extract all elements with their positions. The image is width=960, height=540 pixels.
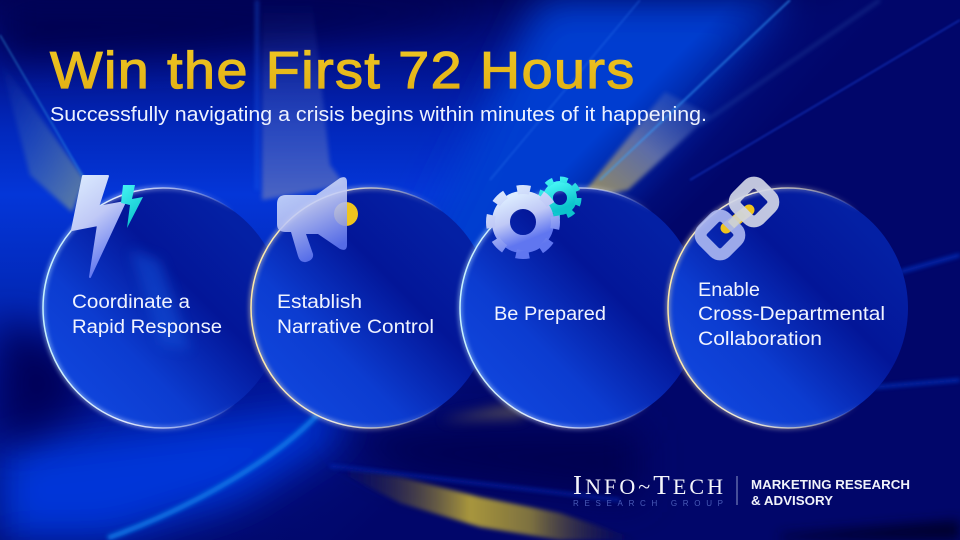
icon: lightning bolts bbox=[72, 176, 143, 277]
icon: gears bbox=[490, 180, 578, 254]
panel: be prepared bbox=[460, 180, 700, 428]
label: establish narrative control: Narrative Control bbox=[277, 317, 434, 338]
panel: establish narrative control bbox=[251, 177, 491, 428]
icon: chain links bbox=[697, 179, 777, 258]
panel: coordinate a rapid response bbox=[43, 176, 283, 428]
label: establish narrative control: Establish bbox=[277, 292, 362, 313]
logo: info-tech research group bbox=[573, 470, 910, 508]
label: coordinate a rapid response: Coordinate a bbox=[72, 292, 190, 313]
logo: info-tech research group: RESEARCH GROUP bbox=[573, 499, 723, 508]
label: coordinate a rapid response: Rapid Response bbox=[72, 317, 222, 338]
logo: info-tech research group: & ADVISORY bbox=[751, 493, 833, 508]
panel: enable cross-departmental collaboration bbox=[668, 179, 908, 428]
logo: info-tech research group: MARKETING RESEARCH bbox=[751, 477, 910, 492]
subtitle: Successfully navigating a crisis begins within minutes of it happening. bbox=[50, 104, 707, 126]
label: enable cross-departmental collaboration: Cross-Departmental bbox=[698, 304, 885, 325]
icon: megaphone bbox=[277, 177, 358, 262]
label: be prepared: Be Prepared bbox=[494, 304, 606, 325]
logo: info-tech research group: INFO~TECH bbox=[573, 470, 723, 500]
label: enable cross-departmental collaboration: Enable bbox=[698, 280, 760, 301]
title: Win the First 72 Hours bbox=[50, 42, 634, 100]
label: enable cross-departmental collaboration: Collaboration bbox=[698, 329, 822, 350]
